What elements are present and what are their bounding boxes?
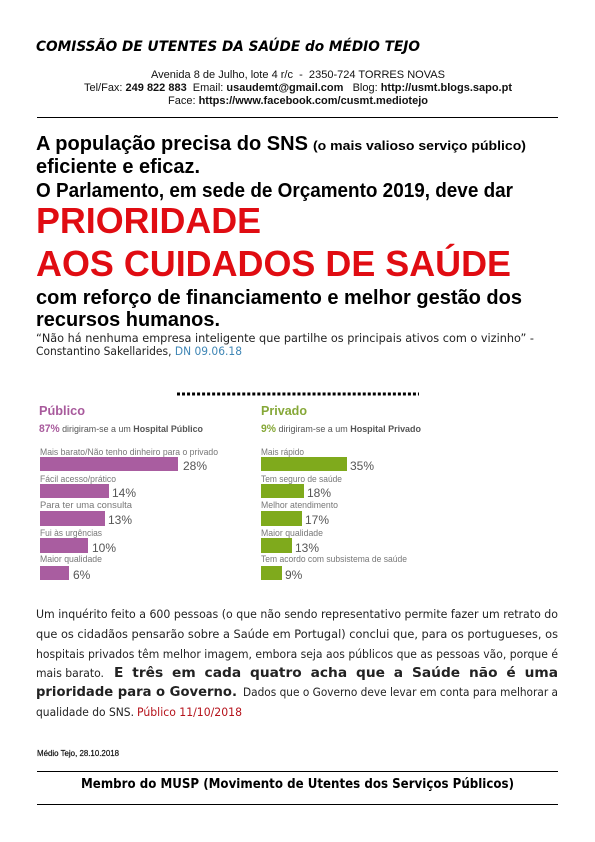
heading: reinforcement: com reforço de financiamento e melhor gestão dos [36, 287, 522, 309]
body paragraph: E três em cada quatro acha que a Saúde não é uma [114, 665, 558, 681]
chart panel: public: 14% [112, 486, 136, 500]
chart panel: public: Maior qualidade [40, 554, 102, 565]
heading: intro: O Parlamento, em sede de Orçamento 2019, deve dar [36, 180, 513, 202]
body paragraph: que os cidadãos pensarão sobre a Saúde em Portugal) conclui que, para os portugueses, os [36, 627, 558, 641]
chart panel: public: Para ter uma consulta [40, 500, 133, 511]
chart panel: public: 28% [183, 459, 207, 473]
chart panel: private: Tem seguro de saúde [261, 474, 342, 485]
quote: “Não há nenhuma empresa inteligente que partilhe os principais ativos com o vizinho” - [36, 331, 534, 345]
heading: intro [36, 133, 526, 202]
contact block: Tel/Fax: 249 822 883 Email: usaudemt@gmail.com Blog: http://usmt.blogs.sapo.pt [84, 82, 512, 94]
chart panel: private: 17% [305, 513, 329, 527]
body paragraph [36, 607, 558, 719]
heading: priority: AOS CUIDADOS DE SAÚDE [36, 242, 511, 284]
contact block [84, 69, 512, 107]
chart panel: private: 35% [350, 459, 374, 473]
chart panel: private: Melhor atendimento [261, 500, 338, 511]
date line: Médio Tejo, 28.10.2018 [37, 749, 120, 758]
heading: reinforcement [36, 287, 522, 331]
body paragraph: prioridade para o Governo. [36, 684, 237, 700]
contact block: Avenida 8 de Julho, lote 4 r/c - 2350-724 TORRES NOVAS [151, 69, 445, 81]
chart panel: private: 13% [295, 541, 319, 555]
chart panel: private: 9% [285, 568, 303, 582]
heading: priority: PRIORIDADE [36, 200, 261, 241]
quote [36, 331, 534, 358]
chart panel: public: 13% [108, 513, 132, 527]
body paragraph: hospitais privados têm melhor imagem, embora seja aos públicos que as pessoas vão, porque é [36, 647, 558, 661]
chart panel: public: Público [39, 403, 85, 418]
chart panel: public: Mais barato/Não tenho dinheiro para o privado [40, 447, 218, 458]
chart panel: private: 9% dirigiram-se a um Hospital Privado [261, 423, 421, 435]
dotted separator [177, 392, 419, 396]
title: COMISSÃO DE UTENTES DA SAÚDE do MÉDIO TEJO [36, 37, 420, 55]
quote: Constantino Sakellarides, DN 09.06.18 [36, 344, 242, 358]
chart panel: public: 87% dirigiram-se a um Hospital Público [39, 423, 203, 435]
heading: reinforcement: recursos humanos. [36, 309, 220, 331]
chart panel: public: Fui às urgências [40, 528, 102, 539]
chart panel: private [261, 403, 421, 582]
chart panel: public: Fácil acesso/prático [40, 474, 116, 485]
heading: priority [36, 200, 511, 284]
chart panel: private: Tem acordo com subsistema de saúde [261, 554, 407, 565]
heading: intro: A população precisa do SNS [36, 133, 308, 155]
body paragraph: Dados que o Governo deve levar em conta para melhorar a [243, 685, 558, 699]
body paragraph: qualidade do SNS. [36, 705, 134, 719]
body paragraph: mais barato. [36, 666, 104, 680]
contact block: Face: https://www.facebook.com/cusmt.mediotejo [168, 95, 428, 107]
chart panel: public [39, 403, 218, 582]
body paragraph: Um inquérito feito a 600 pessoas (o que não sendo representativo permite fazer um retrato do [36, 607, 558, 621]
chart panel: public: 10% [92, 541, 116, 555]
heading: intro: eficiente e eficaz. [36, 156, 200, 178]
heading: intro: (o mais valioso serviço público) [313, 138, 526, 153]
chart panel: private: Privado [261, 403, 307, 418]
chart panel: private: Mais rápido [261, 447, 304, 458]
chart panel: private: 18% [307, 486, 331, 500]
chart panel: private: Maior qualidade [261, 528, 323, 539]
body paragraph: Público 11/10/2018 [137, 705, 242, 719]
chart panel: public: 6% [73, 568, 91, 582]
footer: membership: Membro do MUSP (Movimento de Utentes dos Serviços Públicos) [81, 776, 514, 792]
